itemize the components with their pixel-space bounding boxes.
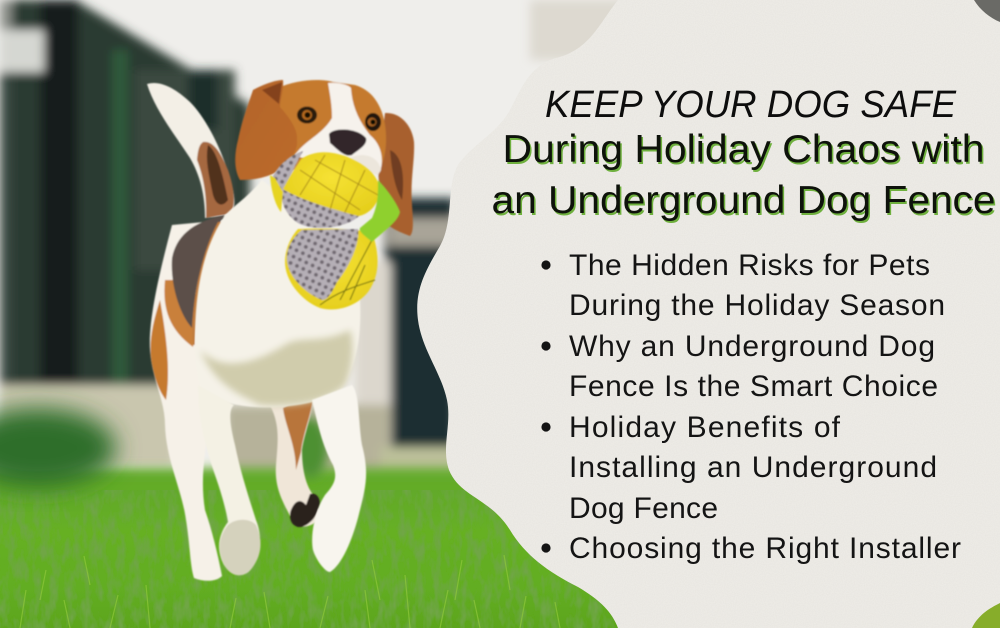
bullet list [541, 249, 961, 565]
heading shadow and heading: During Holiday Chaos with [502, 128, 984, 171]
left eye [297, 106, 317, 124]
grass blades [20, 555, 560, 628]
heading shadow and heading: an Underground Dog Fence [493, 181, 997, 224]
bullet 1: The Hidden Risks for Pets [569, 249, 930, 282]
bullet 3 [541, 411, 937, 525]
right eye [365, 113, 381, 131]
front legs [198, 385, 366, 575]
tail [147, 83, 234, 218]
left ear [235, 80, 297, 180]
bullet 1 [541, 249, 945, 322]
nose [329, 129, 366, 156]
bullet 2 [541, 330, 938, 403]
white blaze and muzzle [295, 83, 382, 173]
dog photo illustration [147, 80, 414, 581]
head [235, 80, 414, 236]
heading shadow and heading: an Underground Dog Fence [492, 179, 996, 222]
right ear [378, 113, 414, 236]
orange skull [273, 80, 386, 170]
heading shadow and heading [492, 128, 997, 224]
green fabric [360, 180, 400, 242]
lower ball [285, 228, 378, 309]
toy balls [270, 151, 400, 309]
heading shadow and heading: During Holiday Chaos with [504, 130, 986, 173]
title line: keep your dog safe: KEEP YOUR DOG SAFE [545, 84, 957, 126]
back leg with raised paw [270, 390, 320, 527]
bullet 2: Fence Is the Smart Choice [569, 370, 938, 403]
bullet 3: Dog Fence [569, 492, 718, 525]
bullet 1: During the Holiday Season [569, 289, 945, 322]
upper ball grey [281, 188, 360, 228]
bullet 3: Holiday Benefits of [569, 411, 841, 444]
upper ball yellow [283, 152, 380, 216]
panel: paper blob [417, 0, 1000, 628]
bullet 3: Installing an Underground [569, 451, 937, 484]
bullet 4: Choosing the Right Installer [569, 532, 961, 565]
chest and belly [195, 180, 362, 407]
bullet 2: Why an Underground Dog [569, 330, 935, 363]
rear leg and haunch [150, 215, 230, 581]
